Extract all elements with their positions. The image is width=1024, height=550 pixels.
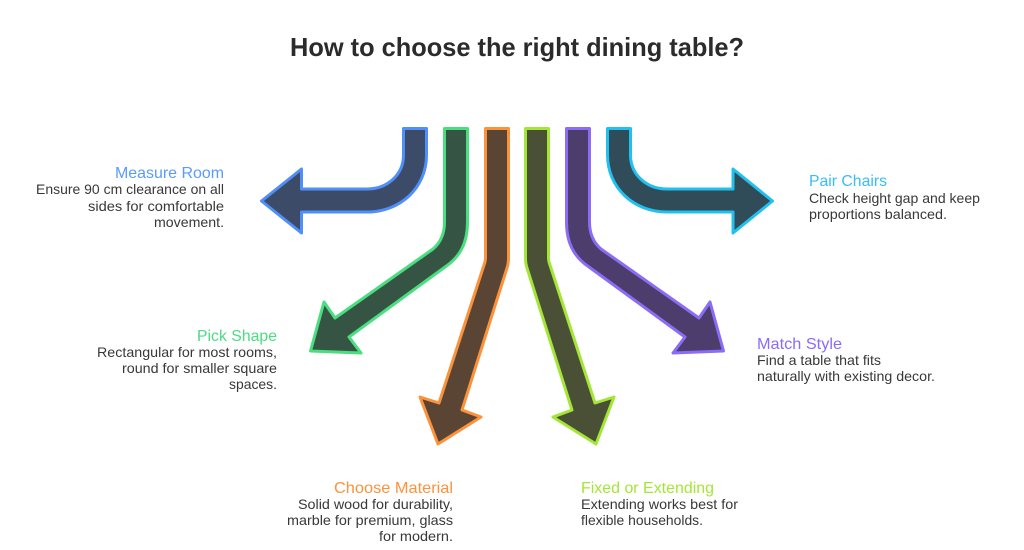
body: pick shape: round for smaller square [122, 360, 277, 376]
body: choose material: Solid wood for durability, [298, 496, 453, 512]
body: match style: Find a table that fits [757, 352, 881, 368]
body: fixed or extending: Extending works best for [581, 496, 738, 512]
heading: fixed or extending: Fixed or Extending [581, 480, 714, 497]
heading: match style: Match Style [757, 336, 842, 353]
body: pair chairs [809, 190, 980, 222]
body: pair chairs: Check height gap and keep [809, 190, 980, 206]
body: pick shape: Rectangular for most rooms, [97, 344, 277, 360]
heading: measure room: Measure Room [115, 165, 224, 182]
arrow: pick shape [310, 128, 468, 353]
body: pick shape: spaces. [229, 376, 277, 392]
text block: pair chairs [809, 173, 980, 222]
arrow: match style [566, 128, 724, 353]
body: pair chairs: proportions balanced. [809, 206, 947, 222]
body: pick shape [97, 344, 277, 392]
body: measure room: movement. [154, 214, 224, 230]
arrow: measure room [262, 128, 426, 233]
body: measure room: sides for comfortable [88, 198, 224, 214]
heading: choose material: Choose Material [334, 480, 453, 497]
body: choose material: marble for premium, glass [287, 512, 453, 528]
text block: choose material [287, 480, 453, 544]
text block: fixed or extending [581, 480, 738, 528]
body: choose material [287, 496, 453, 544]
heading: pick shape: Pick Shape [197, 328, 277, 345]
arrow: pair chairs [608, 128, 772, 233]
text block: pick shape [97, 328, 277, 392]
title: How to choose the right dining table? [290, 32, 744, 62]
text block: match style [757, 336, 935, 384]
body: measure room: Ensure 90 cm clearance on all [36, 181, 224, 197]
text block: measure room [36, 165, 224, 230]
arrow: choose material [420, 128, 508, 444]
body: match style: naturally with existing decor. [757, 368, 935, 384]
body: measure room [36, 181, 224, 230]
body: choose material: for modern. [379, 528, 453, 544]
body: match style [757, 352, 935, 384]
body: fixed or extending [581, 496, 738, 528]
arrow: fixed or extending [526, 128, 614, 444]
heading: pair chairs: Pair Chairs [809, 173, 887, 190]
body: fixed or extending: flexible households. [581, 512, 703, 528]
